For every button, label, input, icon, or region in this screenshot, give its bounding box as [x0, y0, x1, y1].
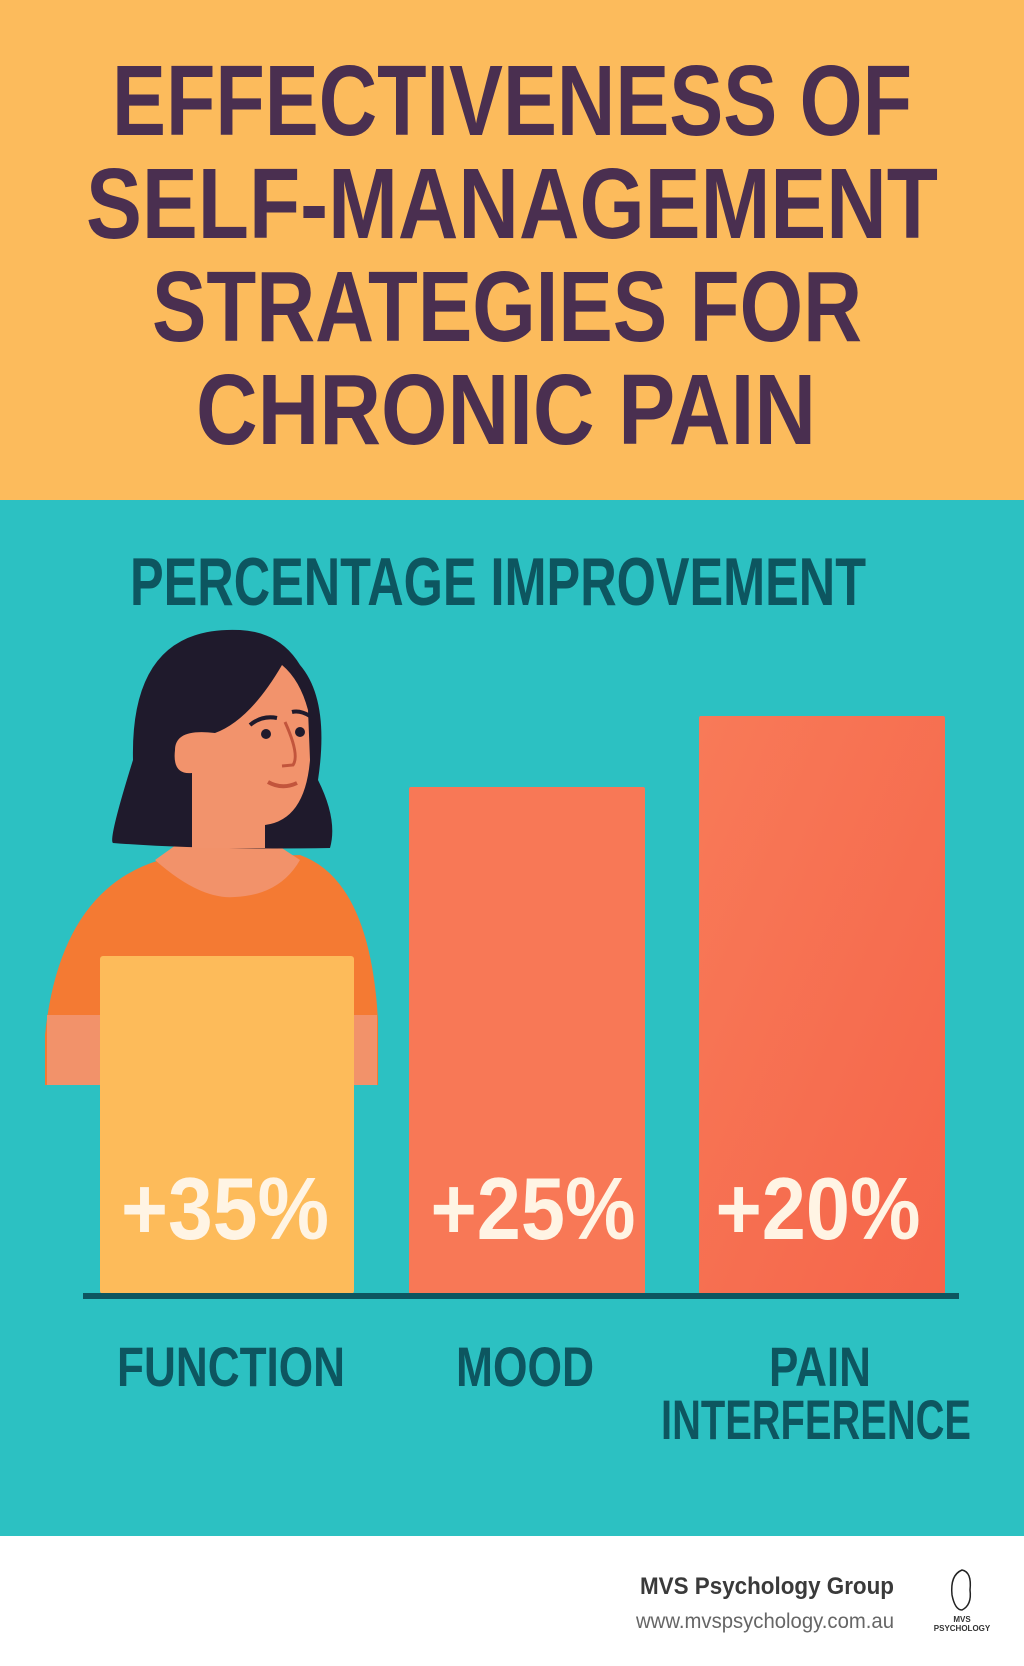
baseline: [83, 1293, 959, 1299]
category labels: [117, 1335, 971, 1451]
footer: brand: MVS Psychology Group: [640, 1573, 894, 1600]
values: +25%: [430, 1159, 636, 1258]
illustration: woman: [45, 630, 378, 1085]
values: [121, 1159, 920, 1258]
category labels: FUNCTION: [117, 1335, 345, 1398]
bar: function: [100, 956, 354, 1294]
footer: brand: [635, 1573, 894, 1633]
icon: logo: PSYCHOLOGY: [934, 1624, 991, 1633]
title: [86, 45, 938, 466]
bar: mood: [409, 787, 645, 1294]
title: CHRONIC PAIN: [196, 354, 816, 466]
title: STRATEGIES FOR: [152, 251, 862, 363]
category labels: MOOD: [456, 1335, 594, 1398]
header panel: [0, 0, 1024, 500]
values: +35%: [121, 1159, 329, 1258]
icon: logo: MVS: [953, 1615, 971, 1624]
bar: pain interference: [699, 716, 945, 1294]
footer: brand: www.mvspsychology.com.au: [635, 1610, 894, 1633]
icon: logo: [934, 1570, 991, 1633]
chart panel: [0, 500, 1024, 1536]
category labels: PAIN: [769, 1335, 871, 1398]
values: +20%: [716, 1159, 920, 1258]
